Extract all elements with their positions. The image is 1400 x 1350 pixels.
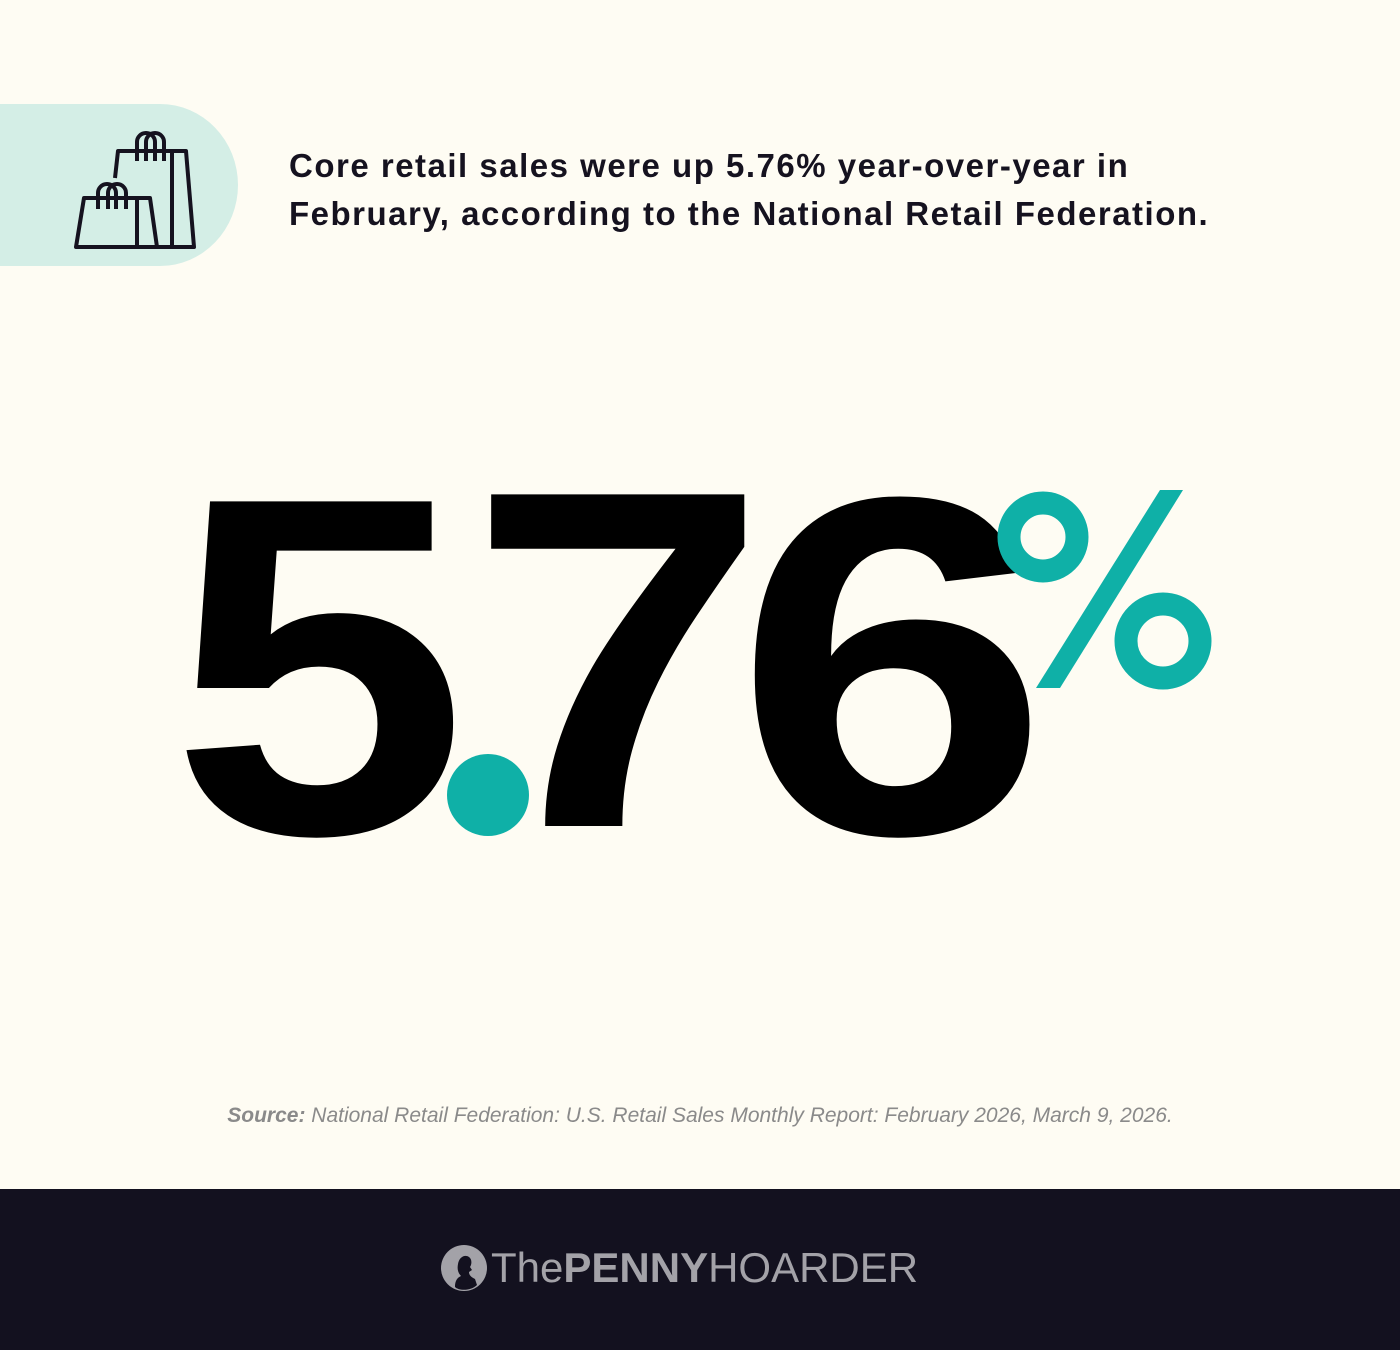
heading text: February, according to the National Retail Federation.	[289, 195, 1209, 232]
heading text: Core retail sales were up 5.76% year-over-year in	[289, 147, 1129, 184]
decimal dot	[447, 754, 529, 836]
logo: ThePENNYHOARDER	[491, 1244, 918, 1291]
percent sign	[1009, 503, 1200, 678]
icon: shopping bags	[76, 133, 194, 247]
footer	[0, 1189, 1400, 1350]
big stat: 5.76%: 7	[468, 391, 768, 929]
source note: Source: National Retail Federation: U.S. Retail Sales Monthly Report: February 2026, March 9, 2026.	[227, 1104, 1173, 1127]
heading text	[289, 147, 1209, 232]
big stat: 5.76%: 5	[170, 398, 468, 936]
big stat: 5.76%: 6	[734, 398, 1050, 936]
icon panel: shopping bags	[0, 104, 238, 266]
